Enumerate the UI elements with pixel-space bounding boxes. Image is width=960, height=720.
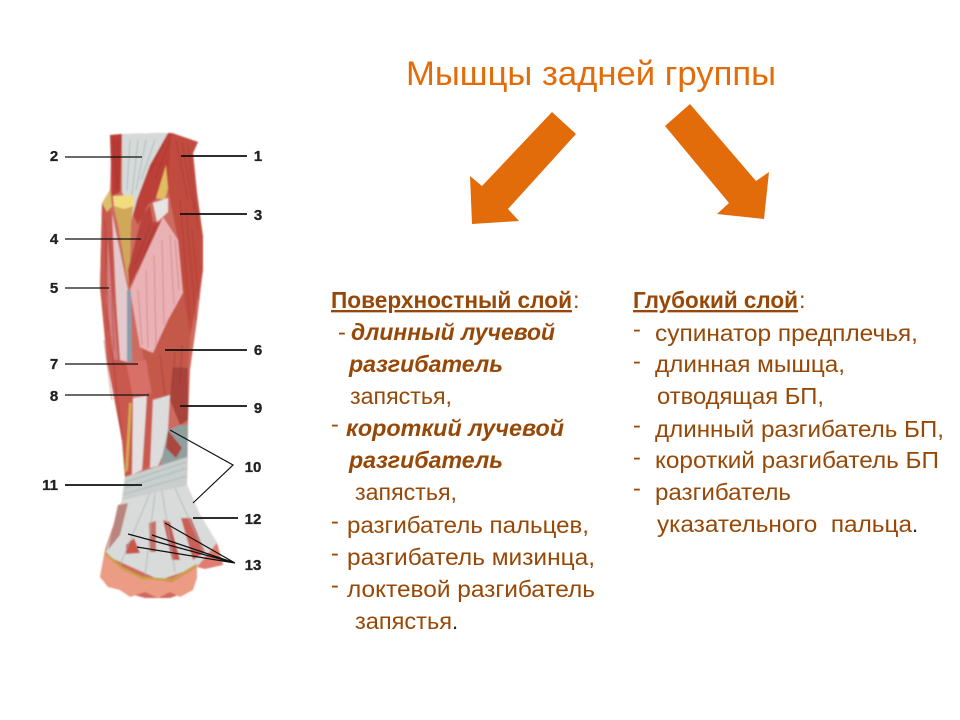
- number labels: 7: [50, 356, 58, 373]
- text block: superficial layer: запястья,: [350, 383, 452, 409]
- text block: superficial layer: :: [573, 287, 580, 313]
- number labels: 11: [42, 477, 58, 494]
- text block: deep layer: -: [633, 348, 641, 374]
- text block: deep layer: [633, 287, 944, 537]
- text block: deep layer: отводящая БП,: [657, 383, 824, 409]
- fingers: [100, 550, 197, 598]
- central grey strip: [127, 290, 132, 362]
- forearm anatomy drawing: [100, 133, 223, 598]
- text block: deep layer: -: [633, 412, 641, 438]
- number labels: 10: [245, 459, 261, 476]
- text block: superficial layer: разгибатель пальцев,: [347, 512, 589, 538]
- muscle 6: [142, 293, 190, 400]
- number labels: 6: [254, 342, 262, 359]
- number labels: 12: [245, 511, 261, 528]
- central dark muscle: [133, 133, 172, 225]
- retinaculum: [122, 457, 187, 500]
- number labels: 3: [254, 207, 262, 224]
- muscle 7: [126, 360, 152, 397]
- bone: [114, 198, 133, 288]
- text block: deep layer: короткий разгибатель БП: [655, 447, 939, 473]
- text block: deep layer: указательного пальца: [657, 511, 913, 537]
- top-left muscle: [110, 134, 122, 196]
- text block: superficial layer: короткий лучевой: [346, 415, 564, 441]
- hand tendons: [105, 485, 217, 580]
- text block: superficial layer: [331, 287, 595, 634]
- number labels: 4: [50, 231, 59, 248]
- muscle fibres: [104, 140, 199, 440]
- text block: superficial layer: разгибатель: [348, 447, 503, 473]
- illustration: forearm muscles with numbered labels: [42, 133, 262, 598]
- text block: superficial layer: -: [331, 508, 339, 534]
- text block: superficial layer: Поверхностный слой: [331, 287, 572, 313]
- arrow: right, to deep layer: [665, 104, 769, 219]
- number labels: 1: [254, 148, 262, 165]
- text block: deep layer: Глубокий слой: [633, 287, 798, 313]
- body silhouette: [100, 133, 223, 598]
- arrow: left, to superficial layer: [470, 112, 576, 224]
- text block: deep layer: супинатор предплечья,: [655, 320, 918, 346]
- text block: deep layer: :: [799, 287, 806, 313]
- number labels: [42, 148, 262, 574]
- left muscle: [100, 203, 133, 477]
- text block: superficial layer: .: [452, 609, 458, 634]
- text block: superficial layer: запястья: [355, 608, 452, 634]
- text block: superficial layer: -: [331, 540, 339, 566]
- text block: superficial layer: -: [338, 319, 346, 345]
- muscle 9: [170, 367, 188, 425]
- text block: deep layer: длинный разгибатель БП,: [655, 416, 944, 442]
- number labels: 9: [254, 400, 262, 417]
- text block: superficial layer: локтевой разгибатель: [347, 576, 595, 602]
- text block: deep layer: -: [633, 316, 641, 342]
- number labels: 2: [50, 148, 58, 165]
- text block: superficial layer: разгибатель мизинца,: [347, 544, 595, 570]
- text block: superficial layer: длинный лучевой: [351, 319, 555, 345]
- right large muscle: [168, 133, 203, 337]
- text block: superficial layer: -: [331, 572, 339, 598]
- text block: superficial layer: запястья,: [355, 479, 457, 505]
- white top tendon: [122, 133, 168, 218]
- text block: superficial layer: разгибатель: [348, 351, 503, 377]
- text block: superficial layer: -: [331, 411, 339, 437]
- text block: deep layer: длинная мышца,: [655, 351, 845, 377]
- wedge muscle: [128, 205, 161, 288]
- text block: deep layer: -: [633, 444, 641, 470]
- tendons at wrist: [132, 396, 147, 475]
- number labels: 8: [50, 388, 58, 405]
- text block: deep layer: разгибатель: [655, 479, 791, 505]
- text block: deep layer: -: [633, 475, 641, 501]
- text block: deep layer: .: [912, 512, 918, 537]
- pink extensor area: [130, 217, 183, 353]
- number labels: 5: [50, 280, 58, 297]
- title: Мышцы задней группы: [406, 55, 776, 93]
- number labels: 13: [245, 557, 261, 574]
- leader lines: [65, 156, 247, 563]
